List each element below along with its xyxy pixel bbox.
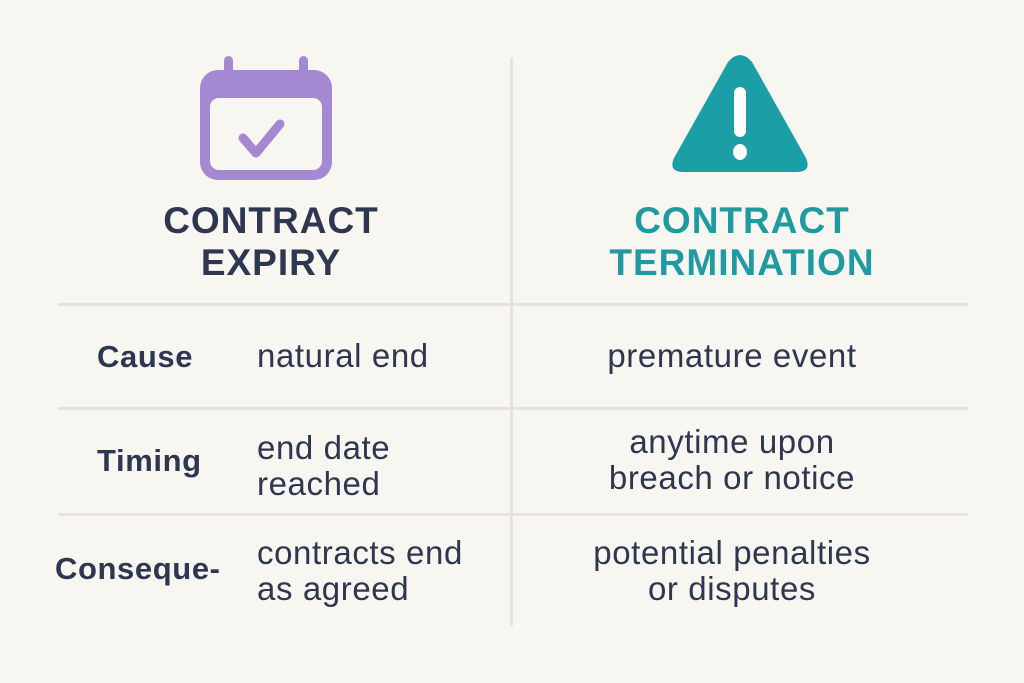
title: contract termination: TERMINATION (609, 242, 875, 283)
text: end date reached: reached (257, 465, 380, 502)
label: cause: Cause (97, 339, 193, 374)
text: anytime (609, 423, 855, 496)
text: penalties: or disputes (648, 570, 816, 607)
text: contracts end (257, 534, 463, 607)
title: contract termination: CONTRACT (634, 200, 850, 241)
text: premature event: premature event (607, 337, 857, 374)
text: contracts end: contracts end (257, 534, 463, 571)
title: contract expiry (163, 200, 379, 283)
text: anytime: breach or notice (609, 459, 855, 496)
text: penalties: potential penalties (593, 534, 871, 571)
label: consequence: Conseque- (55, 551, 221, 586)
label: timing: Timing (97, 443, 202, 478)
title: contract expiry: CONTRACT (163, 200, 379, 241)
text: end date reached (257, 429, 390, 502)
title: contract expiry: EXPIRY (201, 242, 341, 283)
text: natural end: natural end (257, 337, 429, 374)
text: anytime: anytime upon (629, 423, 835, 460)
text: penalties (593, 534, 871, 607)
text: end date reached: end date (257, 429, 390, 466)
icon: warning triangle (672, 55, 808, 172)
text: contracts end: as agreed (257, 570, 409, 607)
title: contract termination (609, 200, 875, 283)
icon: calendar (200, 56, 332, 180)
